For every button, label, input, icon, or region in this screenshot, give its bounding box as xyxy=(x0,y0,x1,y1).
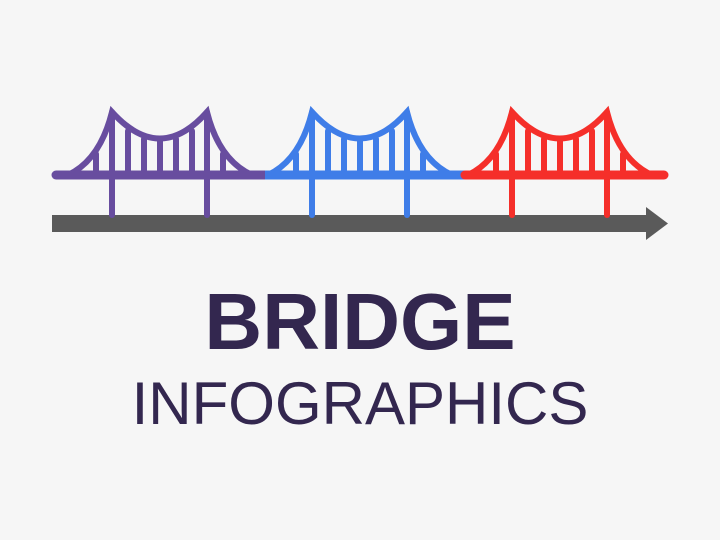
bridge: red xyxy=(465,112,664,215)
subtitle: INFOGRAPHICS: INFOGRAPHICS xyxy=(132,370,588,437)
title: BRIDGE: BRIDGE xyxy=(204,277,516,366)
bridge: purple xyxy=(56,112,265,215)
bridge: blue xyxy=(265,112,465,215)
arrow: timeline road xyxy=(52,207,668,240)
bridge timeline graphic xyxy=(52,106,668,240)
